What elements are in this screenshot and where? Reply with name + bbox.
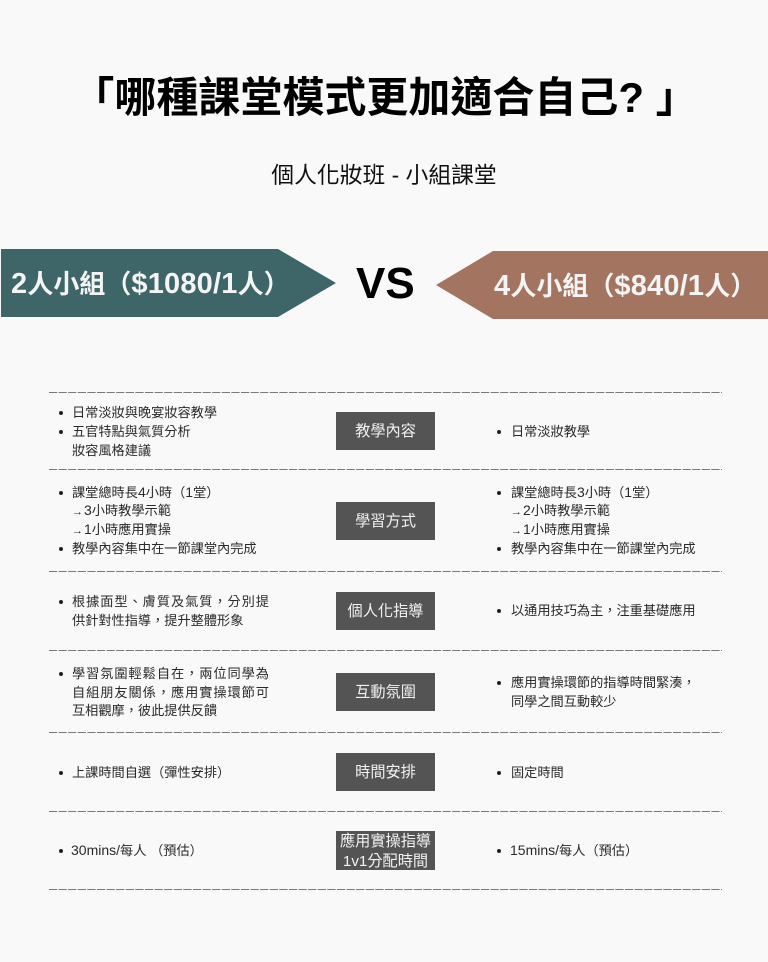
row 2 left text: 3小時教學示範 [84,502,171,518]
row 4 right text: 同學之間互動較少 [511,694,616,709]
VS label: VS [356,259,415,308]
row 2 left text: → [72,525,83,537]
arrow: 4-person group [436,251,768,319]
row 1 left text: 日常淡妝與晚宴妝容教學 [72,405,217,420]
row 1 badge: 教學內容 [355,423,416,440]
row 2 right text: → [511,525,522,537]
row 2 left text: 1小時應用實操 [84,521,171,537]
row 2 right text: 課堂總時長3小時（1堂） [511,484,658,500]
row 2 left text [59,484,257,556]
row 4 badge: 互動氛圍 [355,684,416,701]
row 4 left text: 互相觀摩，彼此提供反饋 [72,703,217,718]
row 2 left text: 課堂總時長4小時（1堂） [72,484,219,500]
row 6 badge: 應用實操指導 [340,833,431,850]
subtitle: 個人化妝班 - 小組課堂 [271,162,497,188]
row 4 left text: 自組朋友關係，應用實操環節可 [72,685,270,700]
row 1 left text [59,405,217,458]
row 6 left text: 30mins/每人 （預估） [71,842,203,858]
row 5 left text: 上課時間自選（彈性安排） [72,765,230,780]
row 2 right text: 2小時教學示範 [523,502,610,518]
row 3 left text: 供針對性指導，提升整體形象 [72,613,243,628]
row 2 left text: 教學內容集中在一節課堂內完成 [72,541,257,556]
row 4 badge [336,673,435,711]
row 1 badge [336,412,435,450]
row 2 right text: 教學內容集中在一節課堂內完成 [511,541,696,556]
row 1 left text: 妝容風格建議 [72,443,151,458]
row 1 right text: 日常淡妝教學 [511,424,590,439]
row 1 left text: 五官特點與氣質分析 [72,424,191,439]
label: 4-person price: 4人小組（$840/1人） [494,270,756,302]
row 2 right text [497,484,696,556]
row 6 badge: 1v1分配時間 [343,853,428,870]
row 5 right text: 固定時間 [511,765,564,780]
row 2 badge: 學習方式 [355,513,416,530]
row 2 left text: → [72,506,83,518]
row 3 left text: 根據面型、膚質及氣質，分別提 [72,594,270,609]
row 6 badge [336,831,435,870]
row 3 left text [59,594,270,628]
row 4 right text: 應用實操環節的指導時間緊湊， [511,675,696,690]
row 4 right text [497,675,696,709]
title: 「哪種課堂模式更加適合自己? 」 [72,74,698,121]
label: 2-person price: 2人小組（$1080/1人） [11,268,290,300]
row 5 badge [336,753,435,791]
row 5 badge: 時間安排 [355,764,416,781]
row 4 left text [59,666,270,718]
row 3 right text: 以通用技巧為主，注重基礎應用 [511,603,696,618]
row 2 right text: → [511,506,522,518]
arrow: 2-person group [1,249,336,317]
row 2 badge [336,502,435,540]
row 2 right text: 1小時應用實操 [523,521,610,537]
row 3 badge: 個人化指導 [348,603,423,620]
row 4 left text: 學習氛圍輕鬆自在，兩位同學為 [72,666,270,681]
row 3 badge [336,592,435,630]
row 6 right text: 15mins/每人（預估） [510,842,638,858]
